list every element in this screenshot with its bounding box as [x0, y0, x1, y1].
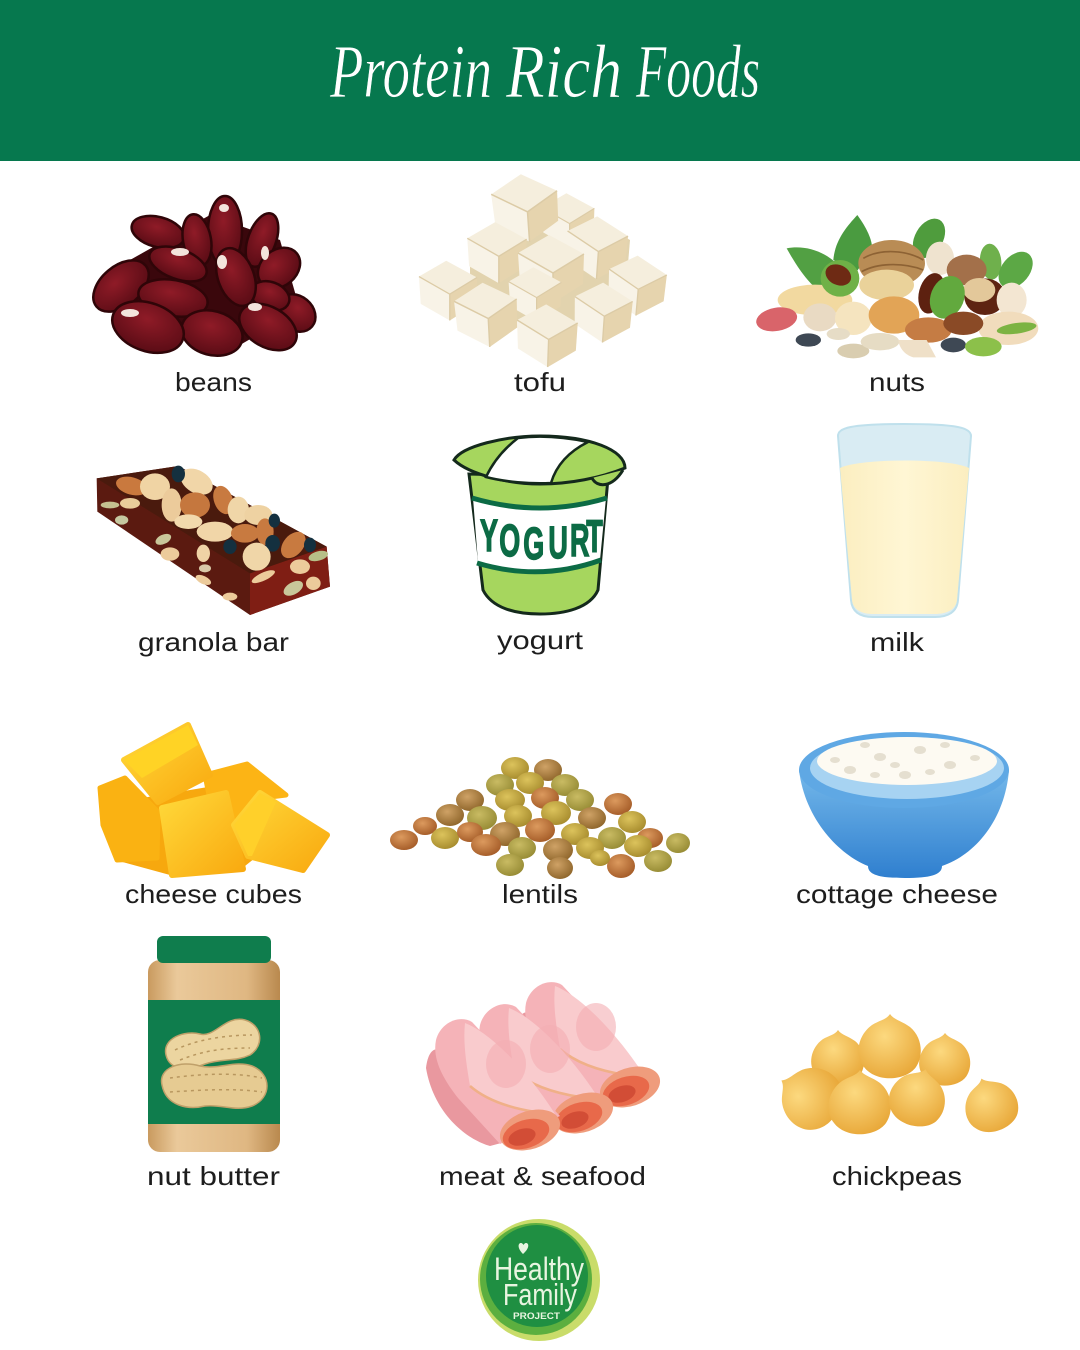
yogurt lid tab	[592, 470, 623, 485]
title	[329, 30, 760, 114]
label: yogurt: yogurt	[497, 625, 584, 655]
title: Rich	[505, 30, 622, 114]
yogurt cup body	[469, 474, 608, 614]
logo: Healthy Family Project	[478, 1219, 600, 1341]
label: meat and seafood: meat & seafood	[439, 1161, 646, 1191]
label: cottage cheese: cottage cheese	[796, 879, 998, 909]
label: tofu: tofu	[514, 367, 566, 397]
food item: cottage cheese bowl	[799, 732, 1009, 878]
yogurt label top and bottom lines	[472, 498, 607, 572]
label: cheese cubes: cheese cubes	[125, 879, 302, 909]
food item: tofu	[419, 172, 668, 368]
label: milk: milk	[870, 627, 925, 657]
food item: lentils	[390, 757, 690, 879]
label: beans: beans	[175, 367, 252, 397]
food item: milk glass	[838, 424, 971, 617]
label: nut butter: nut butter	[147, 1161, 280, 1191]
label: lentils: lentils	[502, 879, 578, 909]
title: Protein	[329, 30, 492, 114]
yogurt lid	[454, 436, 625, 484]
yogurt label text: YOGURT	[480, 510, 603, 569]
food item: yogurt cup	[454, 436, 625, 614]
label: chickpeas: chickpeas	[832, 1161, 962, 1191]
logo: Healthy Family Project: Family	[503, 1277, 577, 1312]
title: Foods	[635, 30, 760, 114]
yogurt label band	[473, 498, 606, 572]
food item: nut butter jar	[148, 936, 280, 1152]
food item: granola bar	[97, 463, 330, 615]
yogurt lid white stripe	[486, 437, 588, 483]
label: granola bar: granola bar	[138, 627, 289, 657]
logo: Healthy Family Project: Healthy	[494, 1251, 584, 1287]
food item: cheese cubes	[100, 725, 327, 875]
food item: chickpeas	[766, 1014, 1025, 1140]
logo: Healthy Family Project: PROJECT	[513, 1311, 561, 1321]
food item: rolled ham	[426, 982, 665, 1158]
header banner	[0, 0, 1080, 161]
label: nuts: nuts	[869, 367, 925, 397]
food item: beans	[84, 196, 323, 362]
food item: nuts	[754, 213, 1040, 358]
